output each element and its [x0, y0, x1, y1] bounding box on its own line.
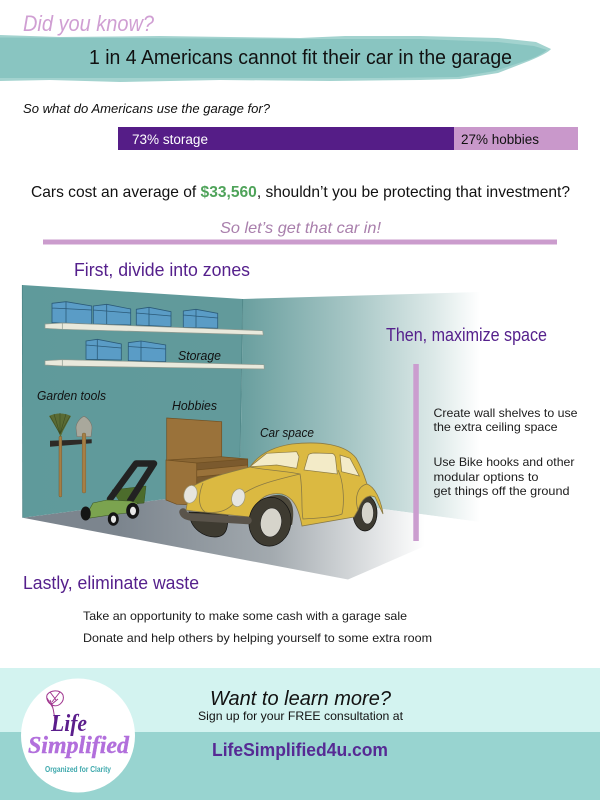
headline text: 1 in 4 Americans cannot fit their car in the garage [89, 47, 512, 69]
text block: maximize tips [434, 406, 578, 498]
front right wheel [254, 495, 293, 525]
windows [250, 452, 299, 468]
icon: tree [47, 691, 63, 722]
text block: waste tips: Donate and help others by helping yourself to some extra room [83, 631, 432, 645]
rear wheel [353, 495, 377, 531]
car body [186, 443, 383, 526]
bumper [183, 512, 248, 520]
front left wheel [189, 512, 228, 537]
icon: workbench [166, 418, 248, 505]
label: garden tools: Garden tools [37, 389, 106, 403]
text block: waste tips [83, 609, 432, 645]
text block: maximize tips: Create wall shelves to use [434, 406, 578, 420]
text block: maximize tips: Use Bike hooks and other [434, 455, 574, 469]
website url: LifeSimplified4u.com [212, 740, 388, 760]
logo: life simplified [21, 678, 135, 792]
text block: maximize tips: get things off the ground [434, 484, 570, 498]
heading: first, divide into zones: First, divide into zones [74, 260, 250, 280]
subheading: so let's get that car in: So let’s get that car in! [220, 220, 382, 237]
icon: garden tools [49, 413, 92, 497]
car cost statement: Cars cost an average of $33,560, shouldn’t you be protecting that investment? [31, 184, 570, 201]
floor [23, 490, 480, 580]
storage label: 73% storage [132, 132, 208, 147]
banner: brush stroke headline [0, 35, 551, 82]
heading: did you know: Did you know? [23, 11, 155, 36]
logo word: simplified: Simplified [28, 733, 130, 759]
label: hobbies: Hobbies [172, 399, 217, 413]
text block: waste tips: Take an opportunity to make some cash with a garage sale [83, 609, 407, 623]
logo tagline: Organized for Clarity [45, 765, 111, 774]
text block: maximize tips: modular options to [434, 470, 539, 484]
call to action: want to learn more: Want to learn more? [210, 688, 392, 710]
icon: lawn mower [81, 464, 154, 526]
shelves [45, 323, 264, 369]
left wall [22, 285, 243, 518]
text block: maximize tips: the extra ceiling space [434, 420, 558, 434]
question text: So what do Americans use the garage for? [23, 101, 271, 116]
heading: then, maximize space: Then, maximize space [386, 325, 547, 345]
storage boxes [52, 302, 218, 362]
call to action: sign up: Sign up for your FREE consultation at [198, 709, 404, 723]
label: car space: Car space [260, 426, 314, 440]
body panel lines [199, 467, 367, 519]
hobbies label: 27% hobbies [461, 132, 539, 147]
headlights [182, 484, 199, 505]
label: storage: Storage [178, 349, 221, 363]
stacked bar chart: garage use [118, 127, 578, 150]
heading: lastly, eliminate waste: Lastly, eliminate waste [23, 573, 199, 593]
footer band [0, 668, 600, 800]
icon: yellow beetle car [182, 443, 383, 549]
garage illustration [22, 285, 480, 580]
logo word: life: Life [50, 711, 87, 737]
right wall [240, 292, 480, 522]
